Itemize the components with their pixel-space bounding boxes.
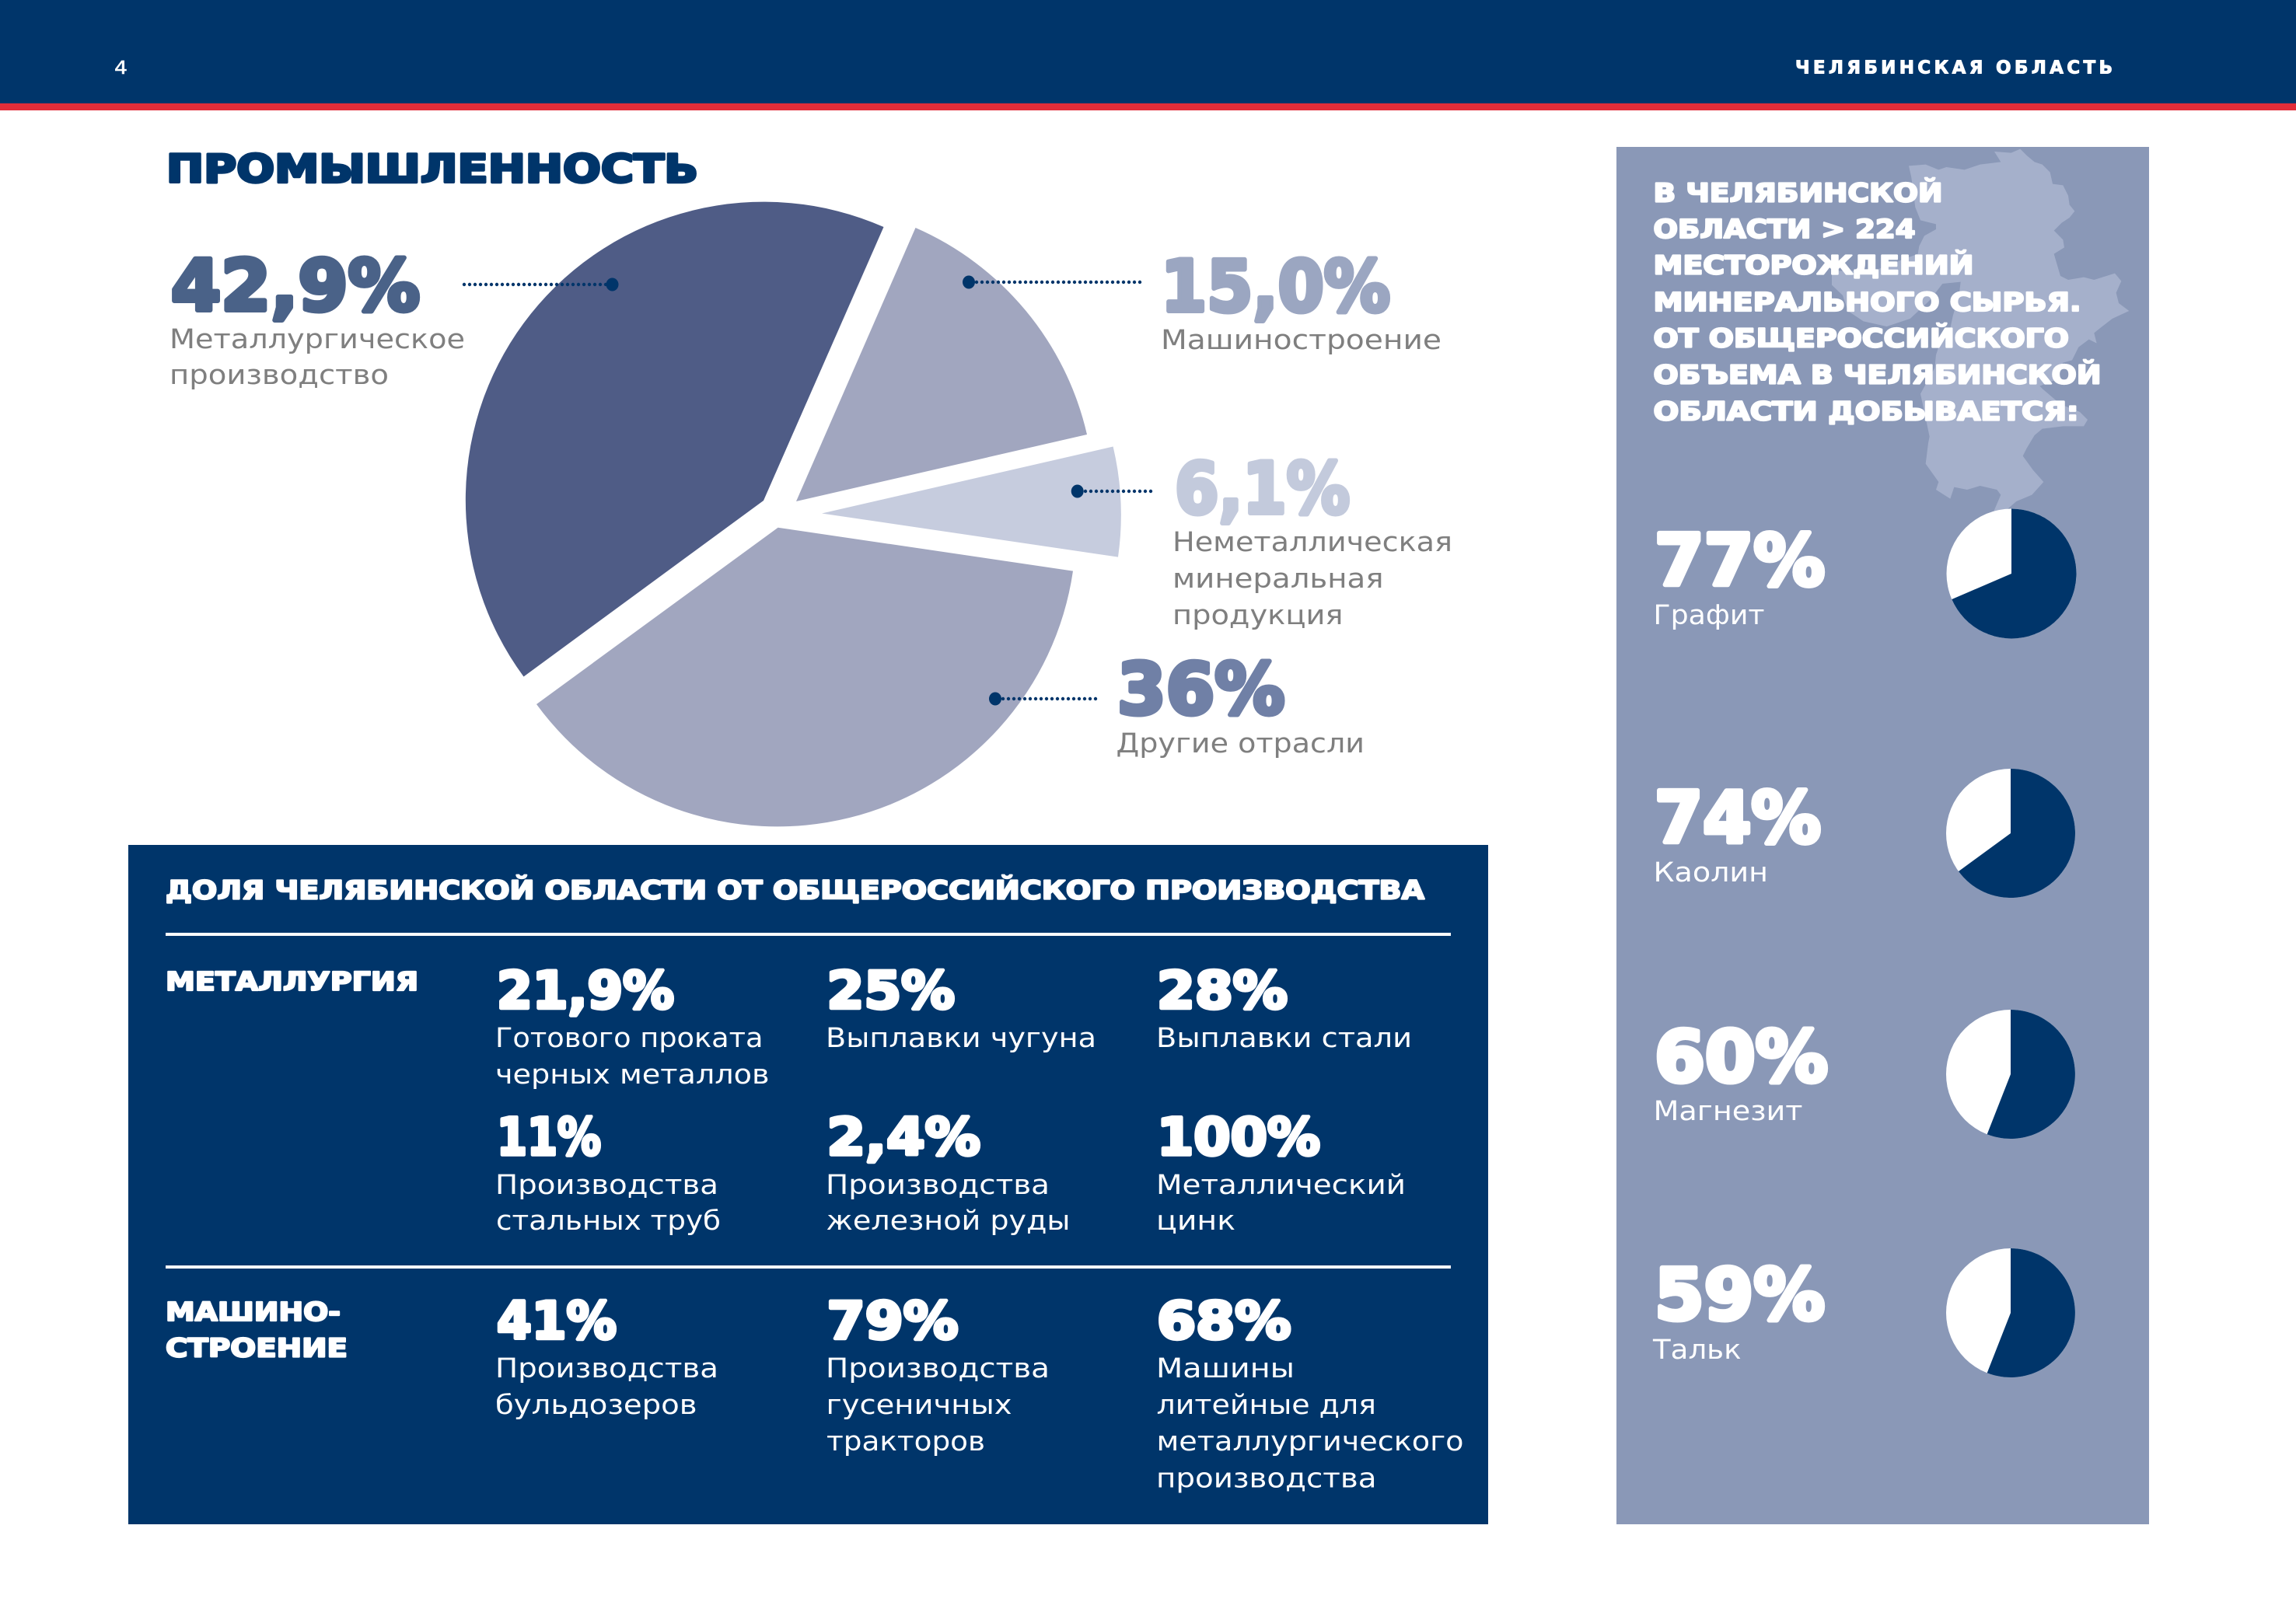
mini pie: talc <box>1946 1248 2075 1377</box>
stat: zinc <box>1156 1107 1406 1237</box>
stat: machinery: Машиностроение <box>1161 325 1442 356</box>
stat: non-metallic mineral products: минеральная <box>1172 564 1384 595</box>
stat: tractors: гусеничных <box>826 1390 1012 1421</box>
stat: zinc: 100% <box>1157 1107 1320 1167</box>
stat: talc: Тальк <box>1652 1335 1742 1366</box>
section label: metallurgy: МЕТАЛЛУРГИЯ <box>166 966 418 996</box>
leader: other <box>989 692 1099 706</box>
stat: zinc: цинк <box>1156 1206 1235 1237</box>
stat: rolled products: Готового проката <box>495 1023 764 1054</box>
section label: machinery: МАШИНО- <box>166 1297 341 1327</box>
stat: metallurgical production: 42,9% <box>171 246 420 327</box>
slice: non-metallic <box>822 446 1121 557</box>
intro text: ОБЛАСТИ ДОБЫВАЕТСЯ: <box>1653 396 2079 426</box>
stat: iron ore: 2,4% <box>827 1107 980 1167</box>
mini pie: graphite <box>1947 508 2077 639</box>
leader: machinery <box>963 275 1144 289</box>
stat: metallurgical production <box>169 246 465 391</box>
slice: other <box>536 528 1073 826</box>
title: ПРОМЫШЛЕННОСТЬ <box>166 146 698 191</box>
stat: steel pipes: 11% <box>497 1107 601 1167</box>
stat: steel: 28% <box>1157 961 1288 1021</box>
panel: mineral resources <box>1616 147 2149 1524</box>
stat: foundry machines <box>1156 1291 1463 1494</box>
stat: rolled products <box>495 961 770 1091</box>
section label: machinery: СТРОЕНИЕ <box>166 1332 348 1363</box>
stat: graphite: 77% <box>1655 521 1825 602</box>
stat: bulldozers: 41% <box>497 1291 617 1351</box>
stat: pig iron: Выплавки чугуна <box>826 1023 1096 1054</box>
stat: iron ore: Производства <box>826 1170 1050 1201</box>
mini pie: magnesite <box>1946 1010 2075 1139</box>
stat: tractors: Производства <box>826 1353 1050 1384</box>
stat: foundry machines: производства <box>1156 1463 1376 1494</box>
region name: ЧЕЛЯБИНСКАЯ ОБЛАСТЬ <box>1795 58 2113 78</box>
stat: tractors <box>826 1291 1050 1457</box>
stat: foundry machines: металлургического <box>1157 1426 1463 1457</box>
mini pie: kaolin <box>1946 769 2075 898</box>
slice: metallurgy <box>466 202 883 676</box>
stat: metallurgical production: производство <box>169 360 389 391</box>
stat: rolled products: 21,9% <box>497 961 674 1021</box>
stat: steel pipes: Производства <box>495 1170 718 1201</box>
stat: bulldozers: бульдозеров <box>495 1390 697 1421</box>
stat: other industries <box>1117 649 1365 759</box>
intro text: ОТ ОБЩЕРОССИЙСКОГО <box>1653 322 2069 353</box>
stat: iron ore <box>826 1107 1070 1237</box>
stat: non-metallic mineral products <box>1172 449 1452 631</box>
stat: rolled products: черных металлов <box>495 1059 770 1091</box>
stat: kaolin: Каолин <box>1653 857 1768 888</box>
intro text: ОБЛАСТИ > 224 <box>1653 214 1916 244</box>
intro text: МЕСТОРОЖДЕНИЙ <box>1653 249 1973 280</box>
intro text: В ЧЕЛЯБИНСКОЙ <box>1653 177 1942 208</box>
stat: metallurgical production: Металлургическое <box>169 324 465 355</box>
stat: other industries: Другие отрасли <box>1117 728 1365 759</box>
stat: non-metallic mineral products: продукция <box>1172 600 1344 631</box>
stat: steel <box>1156 961 1412 1054</box>
leader: metallurgy <box>464 278 619 291</box>
stat: bulldozers: Производства <box>495 1353 718 1384</box>
stat: talc: 59% <box>1655 1255 1825 1336</box>
stat: steel: Выплавки стали <box>1156 1023 1412 1054</box>
section label: machinery <box>166 1297 348 1363</box>
page number: 4 <box>114 58 128 79</box>
stat: non-metallic mineral products: Неметаллическая <box>1172 527 1452 558</box>
intro text <box>1653 177 2101 426</box>
header bar <box>0 0 2296 110</box>
intro text: МИНЕРАЛЬНОГО СЫРЬЯ. <box>1653 287 2081 317</box>
stat: tractors: тракторов <box>826 1426 985 1457</box>
stat: graphite: Графит <box>1653 600 1765 631</box>
stat: steel pipes: стальных труб <box>496 1206 721 1237</box>
stat: non-metallic mineral products: 6,1% <box>1175 449 1350 530</box>
stat: tractors: 79% <box>827 1291 958 1351</box>
stat: machinery: 15,0% <box>1161 246 1390 328</box>
stat: pig iron: 25% <box>827 961 955 1021</box>
panel heading: ДОЛЯ ЧЕЛЯБИНСКОЙ ОБЛАСТИ ОТ ОБЩЕРОССИЙСКОГО ПРОИЗВОДСТВА <box>166 874 1425 905</box>
stat: magnesite: 60% <box>1655 1017 1828 1098</box>
stat: bulldozers <box>495 1291 718 1421</box>
stat: zinc: Металлический <box>1156 1170 1406 1201</box>
stat: other industries: 36% <box>1117 649 1284 731</box>
stat: pig iron <box>826 961 1096 1054</box>
panel: share of Russian production <box>128 845 1488 1524</box>
stat: foundry machines: 68% <box>1157 1291 1291 1351</box>
intro text: ОБЪЕМА В ЧЕЛЯБИНСКОЙ <box>1653 359 2101 390</box>
slice: machinery <box>796 228 1087 501</box>
stat: machinery <box>1161 246 1442 356</box>
stat: foundry machines: литейные для <box>1157 1390 1376 1421</box>
stat: kaolin: 74% <box>1655 777 1821 860</box>
map silhouette: Chelyabinsk region <box>1832 149 2129 513</box>
pie chart: industry structure <box>466 202 1121 826</box>
stat: foundry machines: Машины <box>1156 1353 1295 1384</box>
leader: non-metallic <box>1071 485 1155 497</box>
stat: magnesite: Магнезит <box>1653 1096 1802 1127</box>
stat: steel pipes <box>495 1107 721 1237</box>
stat: iron ore: железной руды <box>826 1206 1070 1237</box>
